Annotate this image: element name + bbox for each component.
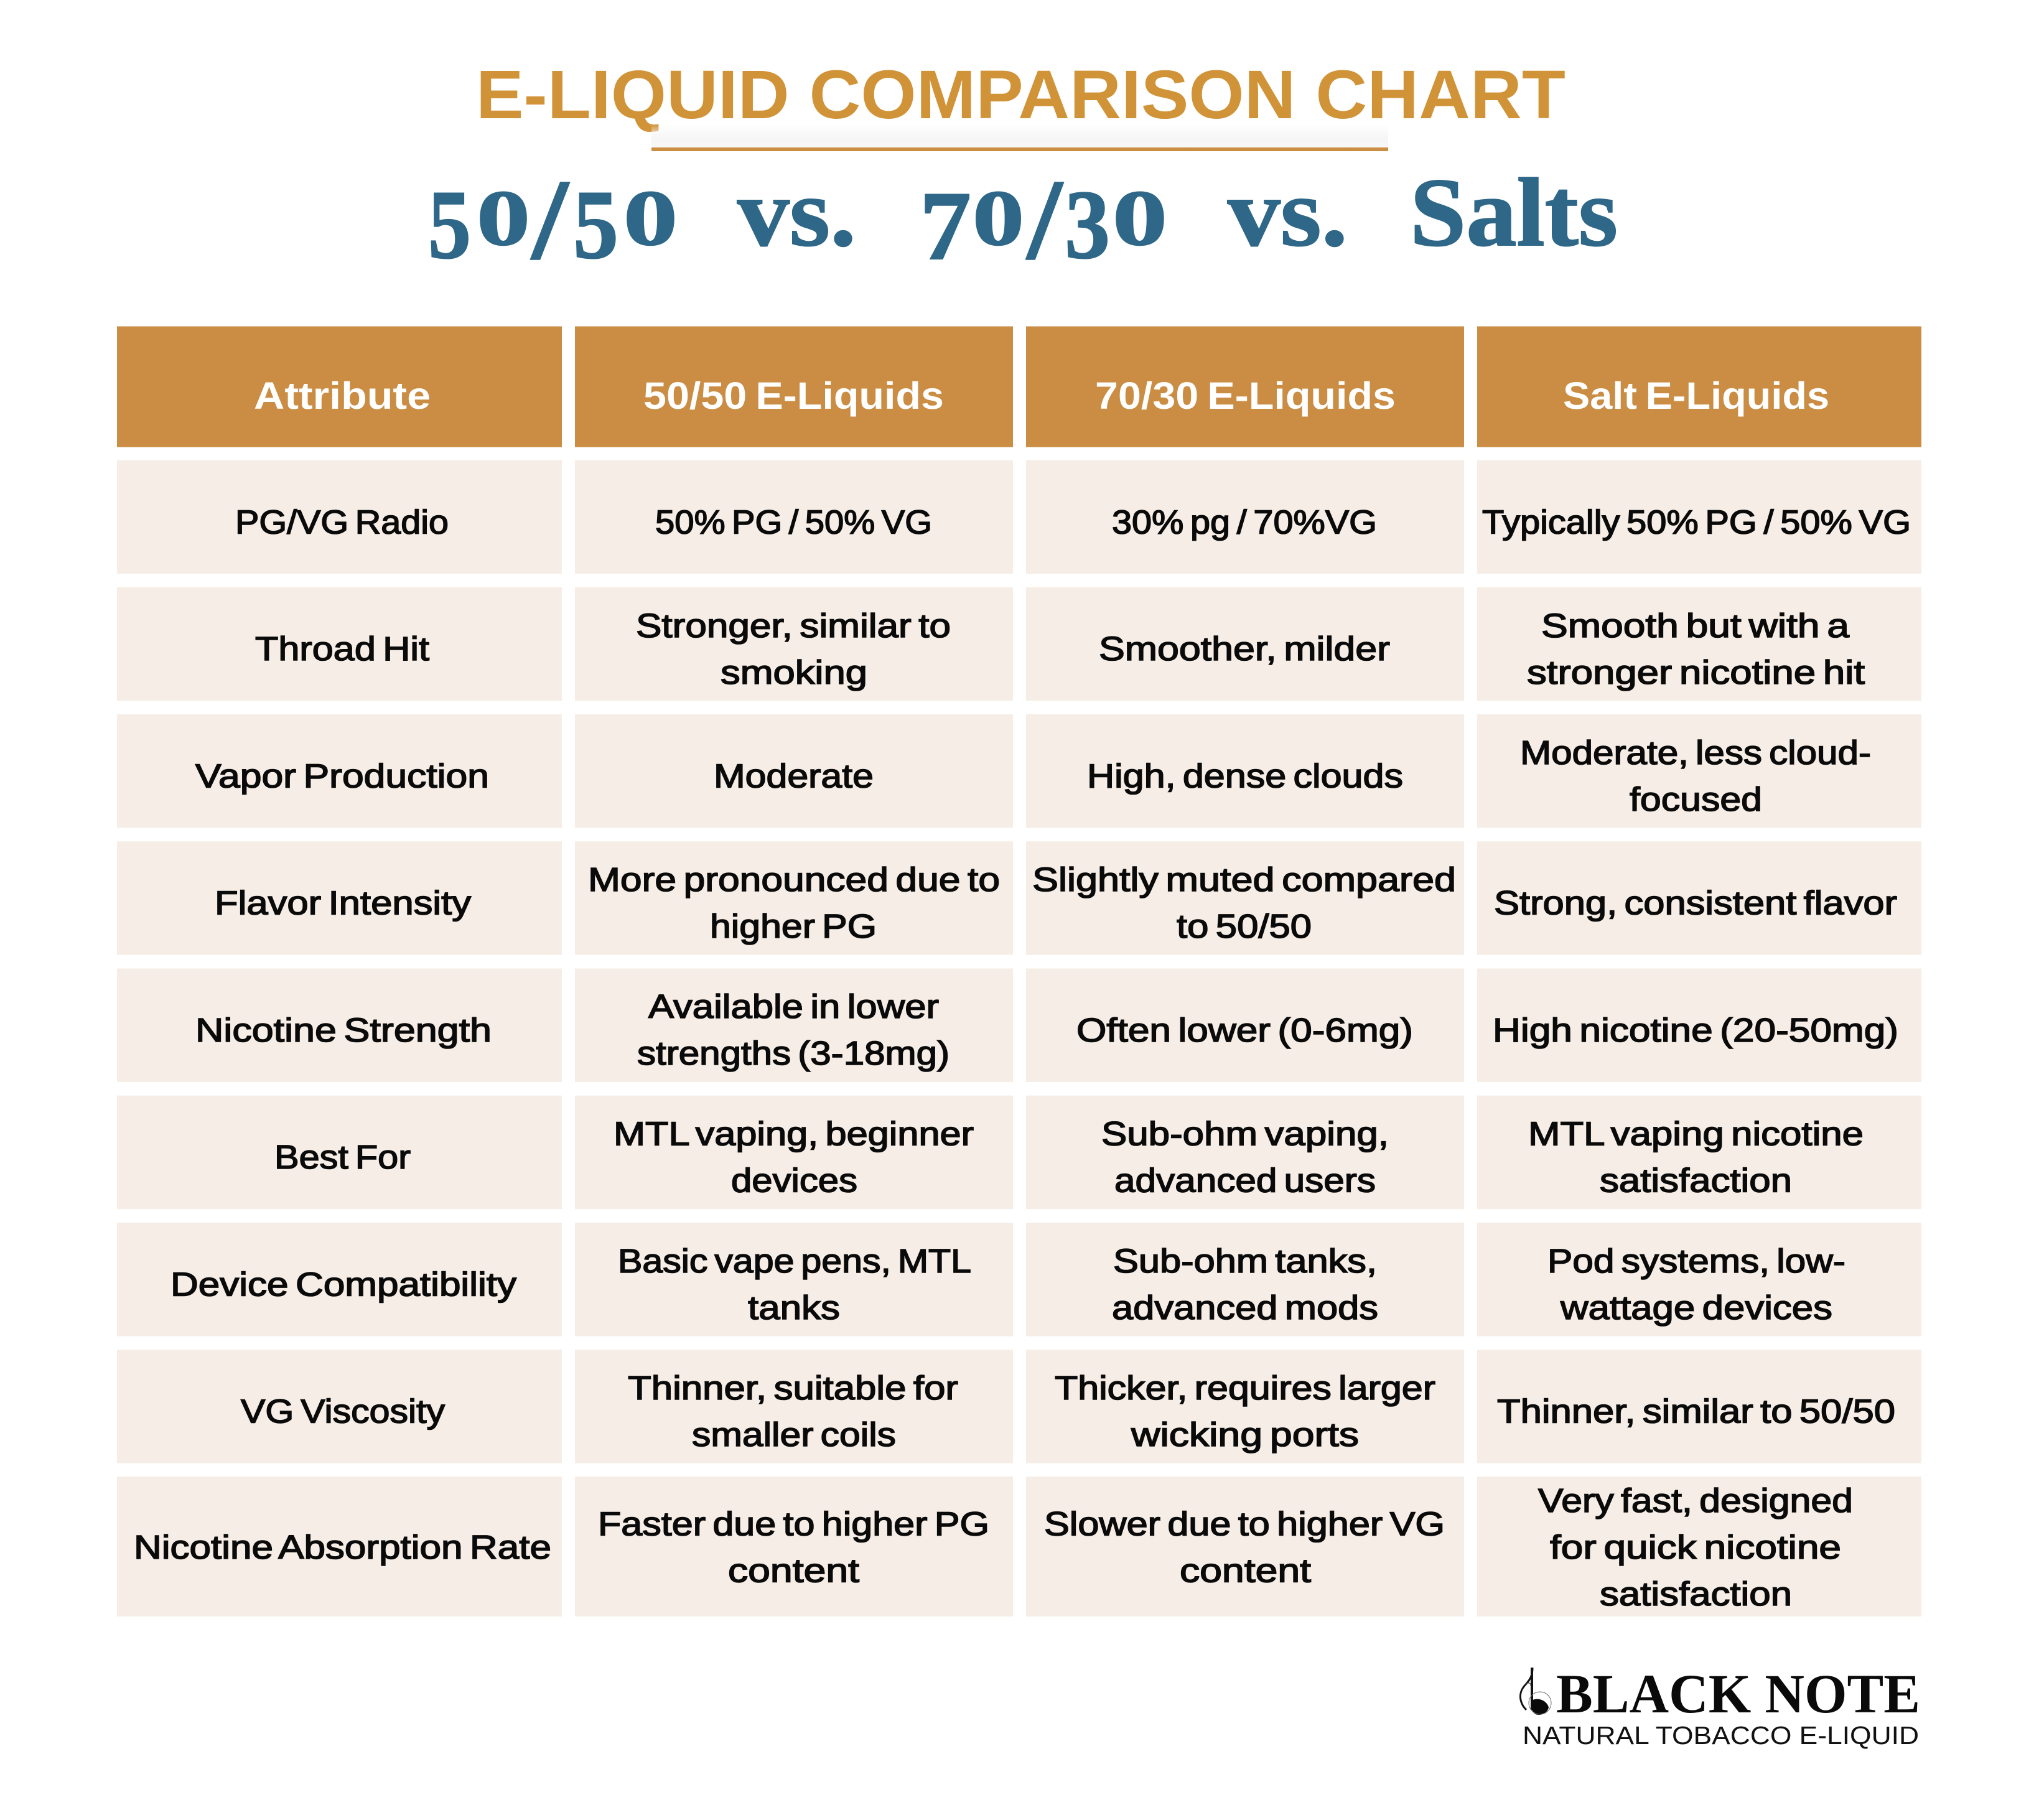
cell: 70/30 bbox=[1026, 841, 1464, 955]
cell: 50/50 bbox=[575, 1350, 1013, 1463]
cell: 70/30: wicking ports bbox=[1131, 1416, 1359, 1454]
cell: 70/30 bbox=[1026, 1350, 1464, 1463]
cell: 50/50: MTL vaping, beginner bbox=[614, 1115, 974, 1152]
title: E-LIQUID COMPARISON CHART bbox=[476, 57, 1565, 133]
title underline bbox=[651, 124, 1388, 151]
cell: attribute: PG/VG Radio bbox=[235, 504, 449, 541]
cell: 70/30 bbox=[1026, 968, 1464, 1082]
cell: attribute bbox=[117, 1223, 562, 1337]
cell: salt: for quick nicotine bbox=[1550, 1529, 1841, 1566]
cell: 50/50: devices bbox=[731, 1162, 857, 1200]
cell: attribute: Nicotine Strength bbox=[195, 1012, 492, 1049]
cell: 70/30: Slower due to higher VG bbox=[1044, 1506, 1445, 1543]
subtitle: 50/50 vs. 70/30 vs. Salts: 0 bbox=[623, 175, 678, 262]
subtitle: 50/50 vs. 70/30 vs. Salts: / bbox=[531, 156, 570, 284]
cell: salt: MTL vaping nicotine bbox=[1528, 1115, 1864, 1152]
cell: 50/50 bbox=[575, 841, 1013, 955]
subtitle: 50/50 vs. 70/30 vs. Salts: 7 bbox=[920, 172, 971, 281]
logo: Black Note bbox=[1520, 1664, 1920, 1750]
icon: music note bbox=[1520, 1668, 1551, 1715]
cell: 50/50: Available in lower bbox=[648, 988, 939, 1025]
subtitle: 50/50 vs. 70/30 vs. Salts: 0 bbox=[973, 175, 1024, 262]
cell: attribute: Device Compatibility bbox=[170, 1266, 516, 1303]
cell: attribute: Flavor Intensity bbox=[215, 885, 471, 922]
cell: salt: Strong, consistent flavor bbox=[1494, 885, 1897, 922]
cell: 70/30: advanced mods bbox=[1112, 1289, 1378, 1327]
logo wordmark: BLACK NOTE bbox=[1556, 1664, 1920, 1725]
subtitle: 50/50 vs. 70/30 vs. Salts: 0 bbox=[477, 175, 530, 262]
cell: attribute bbox=[117, 841, 562, 955]
cell: 50/50: Moderate bbox=[714, 758, 874, 795]
cell: 50/50 bbox=[575, 714, 1013, 828]
cell: 50/50: 50% PG / 50% VG bbox=[655, 504, 932, 541]
header: Attribute bbox=[117, 326, 562, 447]
cell: 50/50: Faster due to higher PG bbox=[598, 1506, 989, 1543]
cell: 70/30: High, dense clouds bbox=[1087, 758, 1403, 795]
cell: 50/50 bbox=[575, 460, 1013, 574]
row: Nicotine Strength bbox=[117, 968, 1921, 1082]
cell: 70/30: content bbox=[1180, 1552, 1311, 1589]
cell: 50/50: Basic vape pens, MTL bbox=[618, 1243, 971, 1280]
cell: attribute bbox=[117, 1350, 562, 1463]
cell: salt: satisfaction bbox=[1600, 1575, 1792, 1613]
cell: salt: Very fast, designed bbox=[1538, 1482, 1853, 1519]
comparison table bbox=[117, 326, 1921, 1617]
cell: 70/30 bbox=[1026, 1223, 1464, 1337]
cell: 50/50: Thinner, suitable for bbox=[628, 1370, 958, 1407]
cell: salt: Thinner, similar to 50/50 bbox=[1497, 1393, 1895, 1430]
cell: salt bbox=[1477, 968, 1921, 1082]
cell: attribute bbox=[117, 587, 562, 701]
cell: attribute: Best For bbox=[274, 1139, 411, 1176]
row: VG Viscosity bbox=[117, 1350, 1921, 1463]
cell: 70/30: to 50/50 bbox=[1177, 908, 1312, 945]
cell: 50/50 bbox=[575, 1223, 1013, 1337]
logo tagline: NATURAL TOBACCO E-LIQUID bbox=[1523, 1721, 1919, 1750]
header: Salt E-Liquids: Salt E-Liquids bbox=[1563, 375, 1829, 417]
cell: 50/50: higher PG bbox=[710, 908, 877, 945]
cell: salt: High nicotine (20-50mg) bbox=[1493, 1012, 1898, 1049]
cell: 50/50: More pronounced due to bbox=[588, 861, 1000, 898]
row: Device Compatibility bbox=[117, 1223, 1921, 1337]
cell: attribute bbox=[117, 1096, 562, 1209]
subtitle: 50/50 vs. 70/30 vs. Salts: 3 bbox=[1065, 170, 1110, 279]
header: 70/30 E-Liquids: 70/30 E-Liquids bbox=[1095, 375, 1396, 417]
cell: attribute bbox=[117, 714, 562, 828]
cell: 50/50 bbox=[575, 1477, 1013, 1617]
header: 50/50 E-Liquids: 50/50 E-Liquids bbox=[643, 375, 944, 417]
cell: 70/30: Sub-ohm tanks, bbox=[1113, 1243, 1377, 1280]
cell: 50/50 bbox=[575, 968, 1013, 1082]
cell: 70/30 bbox=[1026, 1096, 1464, 1209]
cell: 70/30: Smoother, milder bbox=[1099, 630, 1390, 668]
header: Salt E-Liquids bbox=[1477, 326, 1921, 447]
cell: 70/30: Sub-ohm vaping, bbox=[1101, 1115, 1389, 1152]
cell: 70/30: Often lower (0-6mg) bbox=[1076, 1012, 1413, 1049]
cell: 50/50: content bbox=[728, 1552, 859, 1589]
cell: salt: Smooth but with a bbox=[1541, 607, 1850, 645]
cell: 70/30: Slightly muted compared bbox=[1032, 861, 1456, 898]
cell: 70/30: 30% pg / 70%VG bbox=[1112, 504, 1377, 541]
cell: salt: wattage devices bbox=[1560, 1289, 1832, 1327]
cell: 70/30: Thicker, requires larger bbox=[1055, 1370, 1435, 1407]
row: Vapor Production bbox=[117, 714, 1921, 828]
header: 50/50 E-Liquids bbox=[575, 326, 1013, 447]
cell: 70/30: advanced users bbox=[1114, 1162, 1376, 1200]
subtitle: 50/50 vs. 70/30 vs. Salts: 0 bbox=[1113, 175, 1167, 262]
cell: salt bbox=[1477, 714, 1921, 828]
cell: 50/50: smaller coils bbox=[692, 1416, 896, 1454]
cell: attribute: Throad Hit bbox=[255, 630, 429, 668]
cell: 50/50 bbox=[575, 587, 1013, 701]
cell: 70/30 bbox=[1026, 460, 1464, 574]
cell: 50/50: tanks bbox=[748, 1289, 840, 1327]
cell: salt: focused bbox=[1630, 781, 1762, 818]
cell: salt bbox=[1477, 841, 1921, 955]
subtitle: 50/50 vs. 70/30 vs. Salts: 5 bbox=[573, 170, 618, 279]
cell: attribute bbox=[117, 460, 562, 574]
cell: 70/30 bbox=[1026, 1477, 1464, 1617]
subtitle: 50/50 vs. 70/30 vs. Salts: Salts bbox=[1410, 158, 1618, 266]
cell: 50/50 bbox=[575, 1096, 1013, 1209]
cell: salt: Pod systems, low- bbox=[1547, 1243, 1845, 1280]
cell: 50/50: smoking bbox=[721, 654, 867, 691]
cell: 70/30 bbox=[1026, 714, 1464, 828]
cell: salt bbox=[1477, 587, 1921, 701]
cell: attribute: VG Viscosity bbox=[241, 1393, 445, 1430]
row: Best For bbox=[117, 1096, 1921, 1209]
row: Throad Hit bbox=[117, 587, 1921, 701]
row: Nicotine Absorption Rate bbox=[117, 1477, 1921, 1617]
row: PG/VG Radio bbox=[117, 460, 1921, 574]
cell: salt: Moderate, less cloud- bbox=[1520, 734, 1871, 772]
cell: salt bbox=[1477, 1477, 1921, 1617]
subtitle: 50/50 vs. 70/30 vs. Salts: 5 bbox=[428, 170, 471, 279]
cell: attribute bbox=[117, 1477, 562, 1617]
subtitle: 50/50 vs. 70/30 vs. Salts: vs. bbox=[1228, 158, 1348, 266]
row: Flavor Intensity bbox=[117, 841, 1921, 955]
cell: salt: Typically 50% PG / 50% VG bbox=[1482, 504, 1911, 541]
cell: salt: stronger nicotine hit bbox=[1527, 654, 1865, 691]
subtitle: 50/50 vs. 70/30 vs. Salts: vs. bbox=[737, 158, 856, 266]
cell: 50/50: strengths (3-18mg) bbox=[637, 1035, 950, 1072]
cell: attribute: Vapor Production bbox=[195, 758, 489, 795]
cell: 50/50: Stronger, similar to bbox=[636, 607, 951, 645]
cell: attribute: Nicotine Absorption Rate bbox=[134, 1529, 551, 1566]
header row bbox=[117, 326, 1921, 447]
cell: salt: satisfaction bbox=[1600, 1162, 1792, 1200]
subtitle: 50/50 vs. 70/30 vs. Salts: / bbox=[1026, 156, 1064, 284]
cell: salt bbox=[1477, 1223, 1921, 1337]
header: Attribute: Attribute bbox=[254, 375, 431, 417]
cell: 70/30 bbox=[1026, 587, 1464, 701]
cell: salt bbox=[1477, 1350, 1921, 1463]
cell: attribute bbox=[117, 968, 562, 1082]
cell: salt bbox=[1477, 1096, 1921, 1209]
header: 70/30 E-Liquids bbox=[1026, 326, 1464, 447]
cell: salt bbox=[1477, 460, 1921, 574]
